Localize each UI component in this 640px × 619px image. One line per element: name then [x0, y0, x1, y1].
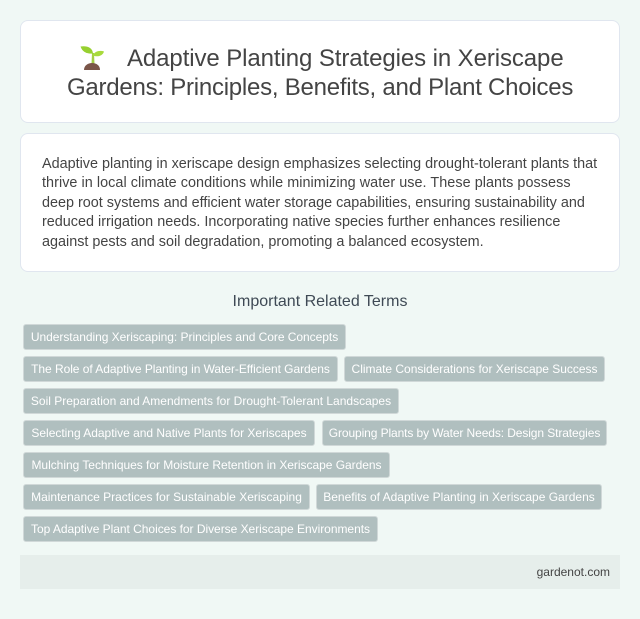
summary text: thrive in local climate conditions while minimizing water use. These plants possess: [42, 175, 571, 191]
icon: seedling: [80, 46, 104, 70]
tag: [23, 388, 399, 414]
summary text: deep root systems and efficient water storage capabilities, ensuring sustainability and: [42, 195, 585, 211]
tag: Top Adaptive Plant Choices for Diverse Xeriscape Environments: [31, 522, 370, 536]
tag: [23, 484, 310, 510]
tag: Soil Preparation and Amendments for Drought-Tolerant Landscapes: [31, 394, 391, 408]
title line 2: Gardens: Principles, Benefits, and Plant Choices: [67, 74, 573, 101]
footer: site name: gardenot.com: [537, 565, 610, 579]
panel: summary card: [20, 133, 620, 272]
tag: [23, 356, 338, 382]
summary text: Adaptive planting in xeriscape design emphasizes selecting drought-tolerant plants that: [42, 156, 597, 172]
tag: Climate Considerations for Xeriscape Success: [352, 362, 597, 376]
heading: related terms: Important Related Terms: [233, 293, 407, 310]
summary text: [42, 156, 598, 250]
tag: Mulching Techniques for Moisture Retention in Xeriscape Gardens: [31, 458, 382, 472]
panel: title card: [20, 20, 620, 123]
tag: Selecting Adaptive and Native Plants for Xeriscapes: [31, 426, 307, 440]
tag: Benefits of Adaptive Planting in Xeriscape Gardens: [323, 490, 595, 504]
summary text: reduced irrigation needs. Incorporating native species further enhances resilience: [42, 214, 560, 230]
tag: [23, 452, 390, 478]
tag: [316, 484, 602, 510]
tag: Grouping Plants by Water Needs: Design Strategies: [329, 426, 600, 440]
tag: [23, 516, 378, 542]
tag: [322, 420, 607, 446]
tag: [23, 420, 315, 446]
summary text: against pests and soil degradation, promoting a balanced ecosystem.: [42, 234, 484, 250]
tag: The Role of Adaptive Planting in Water-Efficient Gardens: [31, 362, 330, 376]
tag: Understanding Xeriscaping: Principles and Core Concepts: [31, 330, 338, 344]
tag: [23, 324, 346, 350]
panel: term tags: [23, 324, 607, 542]
tag: Maintenance Practices for Sustainable Xeriscaping: [31, 490, 302, 504]
footer bar: [20, 555, 620, 589]
title line 1: Adaptive Planting Strategies in Xeriscape: [127, 45, 564, 72]
tag: [344, 356, 605, 382]
